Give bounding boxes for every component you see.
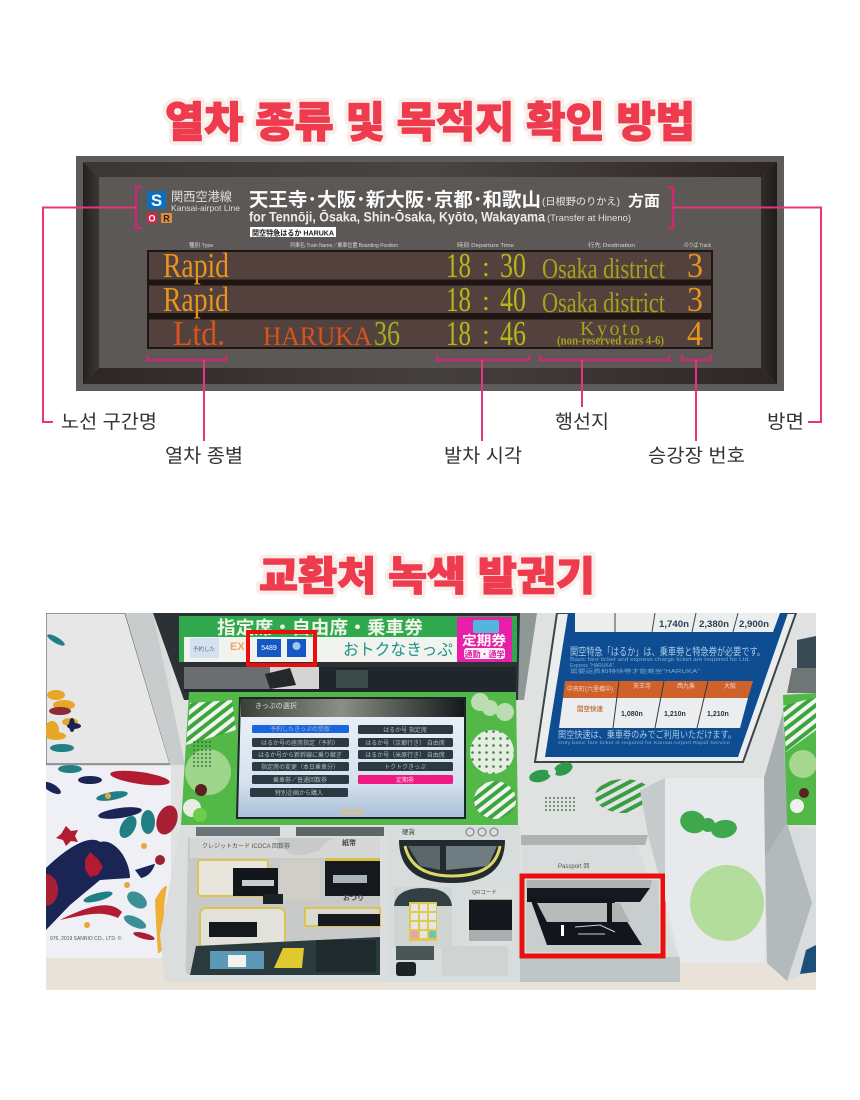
illuminated sign: 指定席・自由席・乗車券: [217, 617, 423, 638]
right wall and fare sign: 関空快速は、乗車券のみでご利用いただけます。: [558, 729, 736, 741]
lower slots: [199, 907, 286, 946]
row 3: :: [482, 320, 490, 351]
callout: train type: 열차 종별: [165, 445, 243, 467]
illuminated sign: 5489: [261, 645, 277, 652]
line name badge: O: [148, 214, 156, 224]
callout: departure time: [437, 355, 529, 467]
row 3: 36: [374, 314, 400, 353]
lower machine body: 硬貨: [402, 827, 416, 836]
adjacent machine on the right: [764, 636, 817, 981]
title: green ticket machine at exchange point: 교환처 녹색 발권기: [259, 555, 595, 599]
row 1: 3: [687, 246, 703, 285]
row 1: [163, 246, 703, 285]
menu buttons: 定期券: [396, 776, 414, 784]
fare table: 関空快速: [577, 704, 604, 713]
row 1: Osaka district: [542, 254, 665, 285]
destination direction text: 天王寺･大阪･新大阪･京都･和歌山: [249, 189, 541, 211]
destination direction text: [249, 189, 660, 238]
column headers: [189, 241, 711, 249]
menu buttons: はるか号（米原行き） 自由席: [365, 751, 445, 759]
row 2: 18: [446, 280, 471, 319]
QR reader: QRコード: [472, 889, 497, 896]
menu buttons: はるか号の座席指定（予約）: [261, 739, 339, 747]
illuminated sign: [179, 616, 517, 662]
illuminated sign: 定期券: [462, 633, 506, 648]
menu buttons: 特別企画から購入: [275, 789, 323, 797]
fare table: 天王寺: [633, 683, 651, 690]
tray: [190, 937, 380, 975]
row 3: 18: [446, 314, 471, 353]
destination direction text: 関空特急はるか HARUKA: [252, 228, 335, 238]
keypad: [394, 888, 452, 941]
menu buttons: 指定席の変更（本日乗車分）: [261, 763, 339, 771]
right wall and fare sign: Express "HARUKA".: [570, 663, 615, 669]
row 3: (non-reserved cars 4-6): [557, 332, 664, 348]
menu buttons: [250, 725, 453, 797]
column headers: のりば Track: [684, 241, 711, 249]
line name badge: 関西空港線: [171, 189, 232, 204]
row 2: Rapid: [163, 280, 229, 319]
fare table: 1,080n: [621, 711, 643, 718]
destination direction text: 方面: [628, 192, 660, 210]
departure board: [76, 156, 784, 391]
title: train type and destination: 열차 종류 및 목적지 확인 방법: [165, 99, 695, 146]
menu buttons: 乗車券／普通回数券: [273, 776, 327, 784]
upper slots: [198, 860, 268, 896]
destination direction text: for Tennōji, Ōsaka, Shin-Ōsaka, Kyōto, Wakayama: [249, 208, 545, 224]
callout: destination: [540, 355, 669, 433]
menu buttons: はるか号 指定席: [383, 726, 427, 734]
right wall and fare sign: 1,740n: [659, 619, 689, 629]
row 1: Rapid: [163, 246, 229, 285]
passport scanner unit: Passport 回: [558, 863, 589, 870]
menu buttons: 予約したきっぷの受取: [270, 725, 330, 733]
destination direction text: (Transfer at Hineno): [547, 213, 631, 223]
red highlight: passport scanner: [522, 876, 663, 956]
bow decoration: [529, 762, 573, 782]
line name badge: [147, 189, 240, 224]
lower machine body: [160, 826, 520, 982]
right wall and fare sign: Basic fare ticket and express charge ticket are required for Ltd.: [570, 657, 750, 663]
line name badge: Kansai-airpot Line: [171, 203, 240, 213]
lower machine body: 紙幣: [342, 838, 356, 847]
row 2: 40: [500, 280, 526, 319]
main machine upper dark housing: [153, 613, 528, 700]
callout: line section name: [43, 187, 157, 433]
callout: destination: 행선지: [555, 411, 609, 433]
row 3: Ltd.: [173, 314, 225, 353]
right wall and fare sign: [518, 613, 797, 813]
passport scanner unit: [520, 778, 680, 982]
fare table: 大阪: [724, 682, 736, 690]
line name badge: S: [151, 191, 162, 210]
photo: green ticket machine: [34, 613, 817, 990]
wall panel and floral artwork: [34, 613, 185, 958]
QR reader: [469, 890, 512, 941]
green panel: [181, 692, 518, 825]
wall panel and floral artwork: 976, 2019 SANRIO CO., LTD. ©: [50, 935, 122, 942]
red highlight: top buttons: [248, 632, 315, 665]
callout: direction: [668, 187, 821, 433]
right wall and fare sign: 2,380n: [699, 619, 729, 629]
menu buttons: はるか号から新幹線に乗り継ぎ: [258, 751, 342, 759]
fare table: 1,210n: [707, 711, 729, 718]
right wall and fare sign: 需要运费和特快券才能乘坐"HARUKA": [570, 668, 700, 675]
touch screen: きっぷの選択: [255, 701, 297, 710]
right wall and fare sign: 2,900n: [739, 619, 769, 629]
right wall and fare sign: Only basic fare ticket is required for Kansai Airport Rapid Service: [558, 740, 731, 745]
line name badge: R: [163, 214, 170, 224]
row 3: [173, 314, 703, 353]
illuminated sign: 予約した: [193, 645, 215, 653]
destination direction text: (日根野のりかえ): [542, 195, 620, 208]
column headers: 時刻 Departure Time: [457, 241, 514, 249]
callout: platform number: [648, 355, 745, 467]
callout: platform number: 승강장 번호: [648, 445, 745, 467]
row 2: :: [482, 286, 490, 317]
menu buttons: トクトクきっぷ: [384, 764, 426, 771]
illuminated sign: 通勤・通学: [464, 649, 504, 659]
row 1: :: [482, 252, 490, 283]
reflection strip: [184, 667, 516, 692]
column headers: 行先 Destination: [588, 241, 635, 249]
row 3: Kyoto: [580, 318, 640, 340]
flowers: [45, 690, 78, 740]
column headers: 種別 Type: [189, 241, 213, 249]
row 3: 4: [687, 314, 703, 353]
floor: [46, 958, 816, 990]
illuminated sign: EX: [230, 641, 245, 653]
fare table: 西九条: [677, 682, 695, 690]
row 2: 3: [687, 280, 703, 319]
title: train type and destination: 열차 종류 및 목적지 확인 방법: [165, 99, 695, 146]
callout: direction: 방면: [767, 411, 804, 433]
menu buttons: はるか号（京都行き） 自由席: [365, 739, 445, 747]
fare table: 1,210n: [664, 711, 686, 718]
row 2: [163, 280, 703, 319]
row 3: HARUKA: [263, 322, 372, 351]
schedule rows: [147, 246, 713, 353]
callout: train type: [148, 355, 243, 467]
callout: line section name: 노선 구간명: [61, 411, 157, 433]
white side panel with bow: [665, 778, 765, 963]
fare table: 中央町(六里橋中): [567, 685, 613, 693]
row 1: 30: [500, 246, 526, 285]
illuminated sign: おトクなきっぷ: [343, 641, 453, 659]
column headers: 列車名 Train Name／乗車位置 Boarding Position: [290, 241, 398, 249]
right column: coin tray: [386, 826, 520, 982]
row 3: 46: [500, 314, 526, 353]
row 1: 18: [446, 246, 471, 285]
title: green ticket machine at exchange point: 교환처 녹색 발권기: [259, 555, 595, 599]
touch screen: [237, 698, 465, 818]
lower machine body: クレジットカード ICOCA 回数券: [202, 842, 290, 850]
callout: departure time: 발차 시각: [444, 445, 522, 467]
right wall and fare sign: 関空特急「はるか」は、乗車券と特急券が必要です。: [570, 645, 765, 658]
lower machine body: おつり: [343, 893, 364, 902]
row 2: Osaka district: [542, 288, 665, 319]
fare table: [559, 681, 753, 728]
